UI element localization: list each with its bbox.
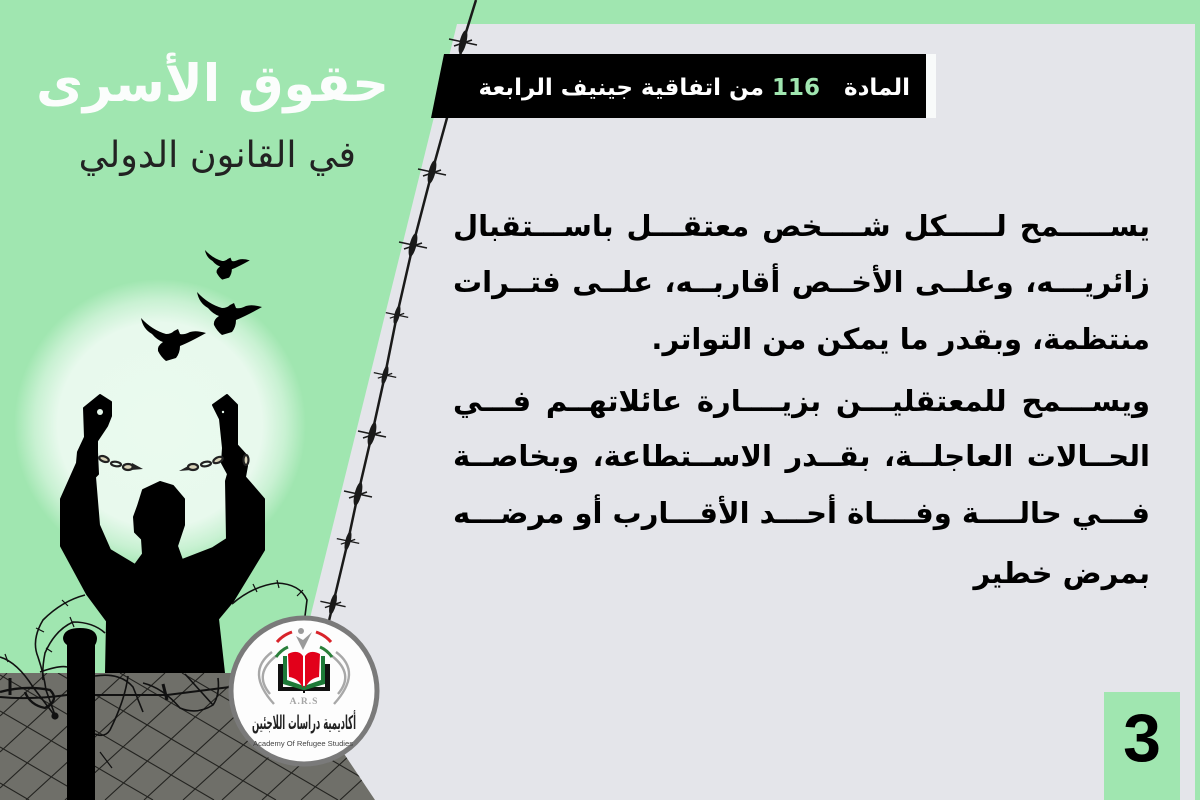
- logo: english name: Academy Of Refugee Studies: [253, 739, 353, 748]
- page number: 3: [1123, 700, 1161, 776]
- body text: الحــالات العاجلــة، بقــدر الاســتطاعة، وبخاصــة: [453, 439, 1150, 473]
- doves: [141, 250, 262, 361]
- logo badge: [231, 618, 377, 764]
- logo: initials: A.R.S: [290, 697, 318, 707]
- body text: زائريـــه، وعلــى الأخــص أقاربــه، علــى فتــرات: [453, 265, 1150, 299]
- logo: figure above book: [296, 628, 312, 650]
- logo: wheat arcs: [259, 652, 349, 704]
- body text: ويســـمح للمعتقليـــن بزيــــارة عائلاتهــم فـــي: [453, 384, 1150, 418]
- body text: منتظمة، وبقدر ما يمكن من التواتر.: [651, 322, 1150, 356]
- broken chain: left: [98, 455, 143, 470]
- number box: [1104, 692, 1180, 800]
- banner white end strip: [926, 54, 936, 118]
- subtitle: في القانون الدولي: [79, 133, 356, 176]
- razor wire coils: [0, 580, 307, 768]
- broken chain: right: [179, 455, 248, 471]
- body text: فـــي حالــــة وفــــاة أحـــد الأقـــارب أو مرضـــه: [453, 496, 1150, 530]
- logo: red and green flag arcs: [276, 632, 332, 657]
- barbed wire diagonal: [320, 0, 477, 625]
- title: حقوق الأسرى: [36, 55, 389, 114]
- fence post: [63, 628, 97, 800]
- panel: grey content background: [265, 24, 1195, 800]
- body text: [453, 209, 1150, 590]
- banner heading: المادة 116 من اتفاقية جينيف الرابعة: [478, 75, 910, 101]
- body text: بمرض خطير: [973, 556, 1150, 590]
- logo badge: أكاديمية دراسات اللاجئين: [252, 710, 356, 734]
- chain-link fence: [0, 673, 400, 800]
- body text: يســـــمح لـــــكل شــــخص معتقـــل باســـتقبال: [453, 209, 1150, 243]
- prisoner silhouette: [61, 395, 264, 673]
- black banner shape: [431, 54, 926, 118]
- logo: open book: [278, 652, 330, 693]
- glow behind prisoner: [14, 279, 306, 571]
